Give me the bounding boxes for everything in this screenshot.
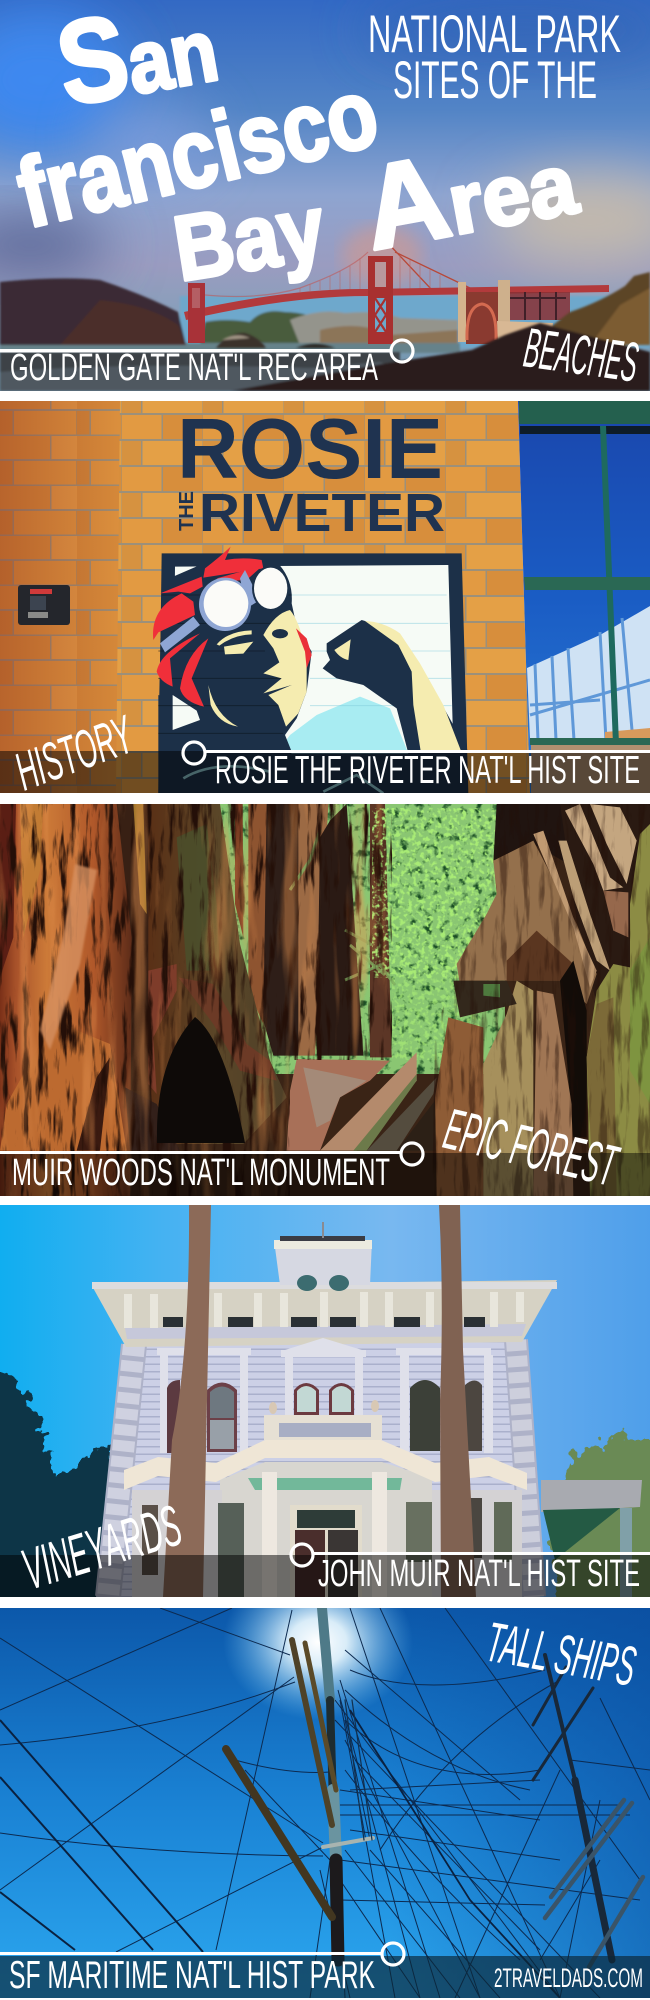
balcony [264,1400,382,1440]
Rosie mural [153,547,468,795]
far mast and yards [533,1655,643,1967]
painted brick lines [290,595,452,706]
broken stump right [435,804,650,1196]
cliff and beach [0,272,650,391]
tall windows [167,1380,482,1453]
cupola [274,1222,372,1291]
eave windows [163,1317,485,1327]
redwood trunks, foreground left [0,804,287,1196]
title [7,0,586,301]
location label: Golden Gate [0,340,413,389]
window hoods [157,1338,493,1453]
tree hollow [157,1017,245,1143]
annex [541,1480,642,1597]
panel: Golden Gate [0,0,650,394]
raised fist and arm [323,620,468,753]
sign: Rosie the Riveter: RIVETER [199,483,445,543]
location label: Muir Woods: MUIR WOODS NAT'L MONUMENT [12,1152,390,1194]
panel: SF Maritime [0,1608,650,1998]
hair [153,547,263,707]
palm trunks [163,1205,476,1597]
window [518,401,650,793]
tag: history: HISTORY [8,704,143,802]
wall switch box [18,585,70,625]
redwood trunks, background [235,804,392,1057]
porch [124,1440,527,1597]
distant bay and hills [0,278,650,353]
panel: Muir Woods [0,804,650,1199]
location label: SF Maritime: SF MARITIME NAT'L HIST PARK [9,1954,375,1997]
Golden Gate Bridge [184,240,609,344]
title: Bay [167,177,331,301]
goggles [199,578,251,631]
sign: Rosie the Riveter: ROSIE [177,402,443,497]
fallen logs [287,1052,438,1151]
location label: SF Maritime [0,1943,650,1998]
face [263,610,307,727]
subtitle [368,5,621,110]
panel: Rosie the Riveter [0,401,650,802]
foliage [290,808,500,1060]
eave brackets [124,1292,524,1328]
sign: Rosie the Riveter: THE [176,491,198,531]
location label: John Muir [0,1544,650,1597]
title: Area [353,107,586,276]
bark texture [0,804,392,1196]
head silhouette [158,565,312,795]
forest background [215,804,505,1074]
stump texture [433,804,650,1196]
title: francisco [7,56,388,248]
pale bark scar [40,864,97,1050]
rigging lines [0,1608,650,1998]
tag: vineyards: VINEYARDS [15,1493,189,1602]
location label: Rosie [0,742,650,793]
main mast and yards [226,1608,373,1960]
location label: Golden Gate: GOLDEN GATE NAT'L REC AREA [10,347,378,389]
panel: John Muir [0,1205,650,1602]
trees [0,1372,650,1610]
heavy stays [0,1710,560,1998]
sign: Rosie the Riveter [176,402,445,543]
house [92,1222,642,1597]
dark brick lines on head [158,595,293,733]
